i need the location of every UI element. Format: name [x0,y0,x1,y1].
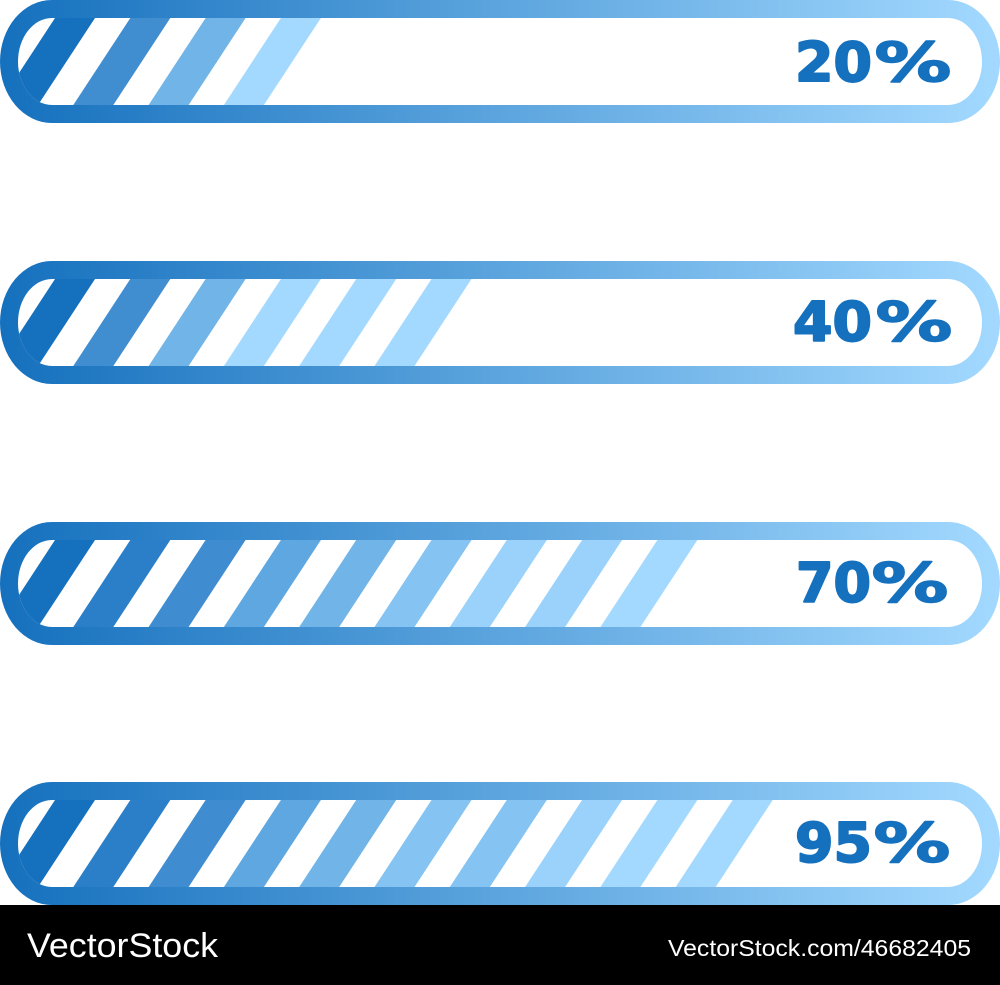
bar outline [0,522,1000,645]
progress bar: 20% [0,0,1000,123]
progress bar: 70% [0,522,1000,645]
label: 70%: % [872,551,948,615]
bar outline [0,261,1000,384]
label: 70%: 70 [796,552,871,614]
label: 95%: 95 [795,812,872,874]
bar interior [18,279,982,366]
label: 20%: 20 [795,31,872,94]
stripes: 20% fill [0,18,321,105]
label: 95% [795,811,950,875]
stripes: 70% fill [0,540,697,627]
label: 95%: % [874,811,950,875]
bar outline [0,0,1000,123]
bar interior [18,540,982,627]
label: 20% [795,31,951,94]
bar outline [0,782,1000,905]
stripes: 40% fill [0,279,472,366]
bar interior [18,18,982,105]
watermark footer band [0,905,1000,985]
label: 40% [793,290,952,354]
bar interior [18,800,982,887]
brand name: VectorStock [27,927,219,965]
progress bar: 95% [0,782,1000,905]
label: 20%: % [874,31,951,94]
label: 40%: % [876,290,952,354]
image id: VectorStock.com/46682405 [668,935,971,961]
label: 40%: 40 [793,290,872,354]
progress bar: 40% [0,261,1000,384]
label: 70% [796,551,948,615]
stripes: 95% fill [0,800,773,887]
